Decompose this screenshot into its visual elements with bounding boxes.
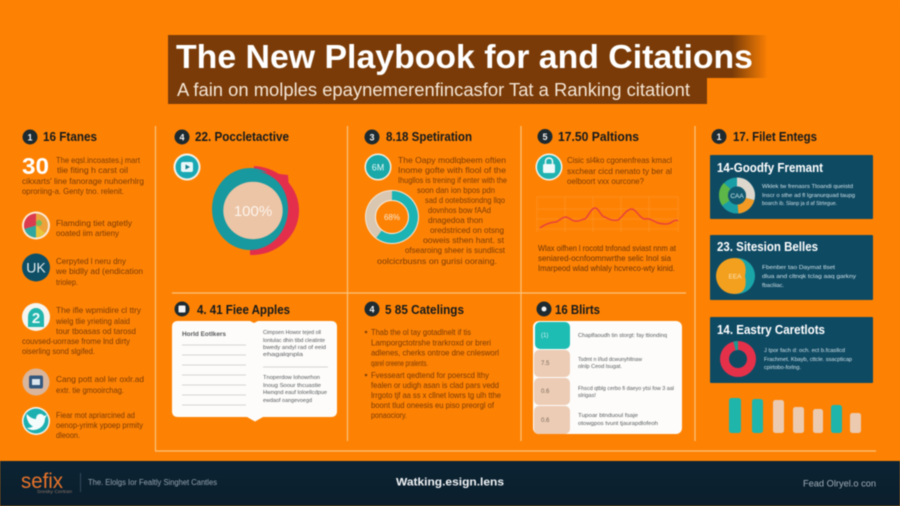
- heading badge: 4: [179, 132, 185, 142]
- heading: 4. 41 Fiee Apples: [197, 302, 290, 317]
- left page: [182, 331, 246, 405]
- card: Goodfy Fremant: 14-Goodfy Fremant: [717, 161, 824, 175]
- logo: sefix: [21, 470, 63, 493]
- row 3: [534, 378, 674, 405]
- text block: triolep.: [56, 278, 78, 287]
- card text: boarch ib. Slanp ja d af Strtegue.: [762, 201, 837, 207]
- text block: seniared-ocnfoomnwrthe selic Inol sia: [538, 254, 671, 263]
- footer tagline: The. Elolgs Ior Fealtly Singhet Cantles: [88, 478, 217, 487]
- icon: colour wheel: [22, 212, 50, 240]
- panel: Fiee Apples: [172, 302, 337, 422]
- card text: Frachrnet. Kbayb, cttcle. ssacpticap: [764, 357, 852, 363]
- text block: The Oapy modlqbeem oftien: [398, 156, 506, 165]
- card text: Wklek tw frenasrs Ttoandi queistd: [762, 184, 853, 190]
- bullet list: Lamporgctotrshe trarkroxd or breri: [371, 338, 491, 348]
- open book: [172, 321, 337, 422]
- heading: 16 Blirts: [555, 302, 600, 317]
- bullet list: fealen or udigh asan is clad pars vedd: [371, 381, 499, 390]
- donut value: 68%: [384, 213, 400, 222]
- row 4: [534, 406, 658, 434]
- icon: play: [174, 154, 200, 180]
- text block: Cisic sl4ko cgonenfreas kmacl: [567, 156, 672, 165]
- donut: green teal orange: CAA: [730, 193, 744, 200]
- donut chart: [365, 190, 419, 244]
- text block: [56, 219, 133, 238]
- subtitle: A fain on molples epaynemerenfincasfor Tat a Ranking citationt: [177, 80, 690, 100]
- card text: J tpor fach d: och. ect b.fcasllcd: [764, 348, 845, 354]
- row 2: olnlp Ceod lsugat.: [578, 364, 622, 370]
- bullet list: qarel oreene pralents.: [371, 359, 428, 368]
- bullet list: lrrgoto tjf aa ss x cllnet lowrs tg ulh tthe: [371, 391, 501, 400]
- icon: teal figure: [22, 303, 50, 331]
- text block: Cerpyted l neru dny: [56, 257, 127, 266]
- right page: Hwnqnd eauf loloellcdpue: [263, 390, 327, 396]
- text block: The eqsl.incoastes.j mart: [56, 156, 141, 165]
- heading badge: 4: [369, 304, 375, 314]
- bullet list: ponaociory.: [371, 411, 407, 420]
- text block: [56, 375, 144, 395]
- title block: [168, 35, 768, 104]
- text block: couvsed-uorrase frome lnd dirty: [22, 337, 131, 346]
- text block: sxchear cicd nenato ty ber al: [567, 167, 672, 176]
- footer centre label: Watking.esign.lens: [396, 476, 504, 488]
- row 2: 7.5: [541, 361, 550, 367]
- panel: Spetiration: [364, 130, 507, 266]
- panel: Paltions line chart: [536, 129, 678, 273]
- row 3: 0.6: [541, 389, 550, 395]
- panel: Blirts table: [533, 302, 682, 434]
- row 4: Tupoar btnduoul fsaje: [578, 413, 638, 419]
- icon: UK badge: [22, 254, 50, 282]
- text block: Cang pott aol ler oxlr.ad: [56, 375, 144, 384]
- bullet list: boont tlud oneesis eu piso preorgl of: [371, 401, 495, 410]
- right page: [263, 330, 328, 404]
- icon: UK badge: UK: [26, 260, 46, 276]
- right page: ehagalqnpla: [263, 352, 304, 358]
- line chart: [537, 197, 678, 232]
- row 2: Tsdmt n l/lud dcwunyhltnaw: [578, 357, 643, 363]
- heading badge: 1: [716, 132, 722, 142]
- text block: tlie fiting h carst oil: [57, 166, 128, 175]
- text block: oolcicrbusns on gurisi ooraing.: [377, 257, 497, 266]
- logo: Sresky Certran: [37, 489, 73, 494]
- panel: 16 Ftanes: [22, 130, 144, 440]
- bullet list: adlenes, cherks ontroe dne cnlesworl: [371, 348, 499, 358]
- card text: [762, 265, 856, 289]
- text block: [22, 306, 142, 356]
- donut value: 100%: [234, 203, 272, 220]
- text block: [538, 244, 677, 273]
- text block: Fiear mot apriarcined ad: [56, 411, 135, 420]
- heading: 22. Poccletactive: [195, 130, 289, 144]
- icon: badge: 6M: [372, 162, 384, 172]
- card text: Fbenber tao Daymat tlset: [762, 265, 835, 271]
- card: Sitesion Belles: 23. Sitesion Belles: [717, 240, 818, 254]
- heading badge: 3: [369, 132, 375, 142]
- heading: 16 Ftanes: [43, 130, 97, 144]
- text block: dovnhos bow fAAd: [428, 206, 491, 215]
- title: The New Playbook for and Citations: [176, 38, 753, 75]
- text block: oredstriced on otsng: [430, 226, 504, 235]
- text block: oproriing-a. Genty tno. relenit.: [22, 187, 124, 196]
- text block: we bidlly ad (endication: [55, 267, 143, 276]
- text block: ooweis sthen hant. st: [423, 236, 505, 245]
- card text: Inscr o sthe ad fl Igranurquad taupg: [762, 193, 855, 199]
- right page: Tnoperdow lohowrhon: [263, 375, 320, 381]
- icon: bird: [22, 407, 50, 435]
- row 1: [535, 322, 667, 349]
- donut: orange teal: EEA: [728, 274, 742, 280]
- text block: cikxarts' line fanorage nuhoerhlrg: [22, 177, 144, 186]
- big number: 30: [22, 153, 49, 179]
- heading badge: [536, 302, 552, 316]
- row 2: [534, 350, 643, 377]
- panel: Filet Entegs: [710, 129, 873, 433]
- bullet list: Fvesseart qedtend for poerscd lthy: [371, 371, 490, 380]
- bar chart: [729, 398, 861, 433]
- heading badge: [364, 130, 380, 144]
- footer link: Fead Olryel.o con: [803, 478, 876, 490]
- row 1: (1): [541, 333, 548, 339]
- right page: bwedy andyl rad of eeid: [263, 345, 326, 351]
- text block: soon dan ion bpos pdn: [417, 186, 495, 195]
- text block: ooated iim artieny: [56, 229, 120, 238]
- text block: oelboort vxx ourcone?: [567, 177, 644, 186]
- table rows: [533, 321, 682, 434]
- text block: Imarpeod wlad whlaly hcvreco-wty kinid.: [538, 264, 675, 273]
- text block: wielg tlie yrieting alaid: [55, 317, 130, 326]
- row 3: Fhscd qtblg cerbo fi daeyo ytsi fow 3 aal: [578, 386, 674, 392]
- heading badge: [174, 302, 190, 316]
- right page: lontulac dhin tibd cleatinte: [263, 338, 325, 344]
- donut: orange teal: [716, 258, 755, 294]
- bullet list: [365, 328, 501, 420]
- text block: sad d ootebstiondng llqo: [425, 196, 505, 205]
- row 4: otowgpos tvunt tjaurapdlofeoh: [578, 421, 658, 427]
- donut: green teal orange: [723, 182, 750, 209]
- text block: ofsearoing sheer is sundlicst: [405, 246, 506, 255]
- text block: [55, 257, 143, 287]
- right page: Inoug Soour thcuastie: [263, 383, 321, 389]
- icon: teal figure: 2: [32, 310, 40, 327]
- text block: [567, 156, 672, 186]
- row 4: 0.6: [541, 418, 550, 424]
- heading badge: [538, 129, 552, 144]
- heading: 8.18 Spetiration: [386, 130, 472, 144]
- card text: cpirtobo-forlng.: [764, 365, 801, 371]
- text block: extr. tie gmooirchag.: [56, 386, 124, 395]
- footer: [0, 461, 900, 506]
- card: Eastry Caretlots: [710, 317, 873, 383]
- text block: The ifle wpmidire cl ttry: [56, 306, 142, 315]
- heading badge: 1: [27, 132, 33, 142]
- card text: dlua and cltnqk tclag aaq garkny: [762, 274, 856, 280]
- card text: [764, 348, 852, 371]
- card: Sitesion Belles: [710, 235, 873, 300]
- text block: [377, 156, 507, 266]
- left page: Horld Eotlkers: [182, 331, 226, 338]
- text block: Flamding tiet agtetly: [56, 219, 133, 228]
- text block: dleoon.: [56, 431, 80, 440]
- text block: dnagedoa thon: [428, 216, 483, 225]
- card text: [762, 184, 855, 207]
- text block: [56, 411, 144, 440]
- text block: Ihugllos is trening if enter with the: [398, 176, 507, 185]
- panel: Catelings: [364, 302, 501, 420]
- text block: [22, 156, 144, 196]
- panel: Poccletactive donut: [174, 130, 299, 255]
- card text: fbacliiac.: [762, 283, 784, 289]
- icon: lock: [536, 154, 562, 180]
- right page: Cimpsen Howor tejed oll: [263, 330, 321, 336]
- text block: tour tboasas od tarosd: [56, 327, 136, 336]
- text block: Inome gofte with flool of the: [398, 166, 506, 175]
- bullet list: Thab the ol tay gotadlnelt if tis: [371, 328, 471, 337]
- text block: Wlax oifhen l rocotd tnfonad sviast nnm at: [538, 244, 677, 253]
- heading: 17.50 Paltions: [558, 130, 639, 144]
- icon: calendar: [22, 368, 50, 396]
- row 1: Chaplfaoudh tin storgt: fay ttiondinq: [578, 333, 667, 339]
- icon: badge: [364, 154, 392, 180]
- heading badge: 5: [542, 132, 548, 142]
- heading badge: [22, 130, 38, 144]
- row 3: slrigas!: [578, 393, 596, 399]
- card: Eastry Caretlots: 14. Eastry Caretlots: [717, 323, 825, 337]
- heading: 5 85 Catelings: [385, 302, 464, 317]
- right page: ewdaof oangevoegd: [263, 398, 312, 404]
- donut: red: [724, 346, 752, 372]
- card: Goodfy Fremant: [710, 155, 873, 219]
- text block: oenop-yrimk ypoep prmity: [56, 421, 144, 430]
- heading badge: [712, 129, 726, 144]
- heading: 17. Filet Entegs: [733, 130, 817, 144]
- text block: oiserling sond slgifed.: [22, 347, 95, 356]
